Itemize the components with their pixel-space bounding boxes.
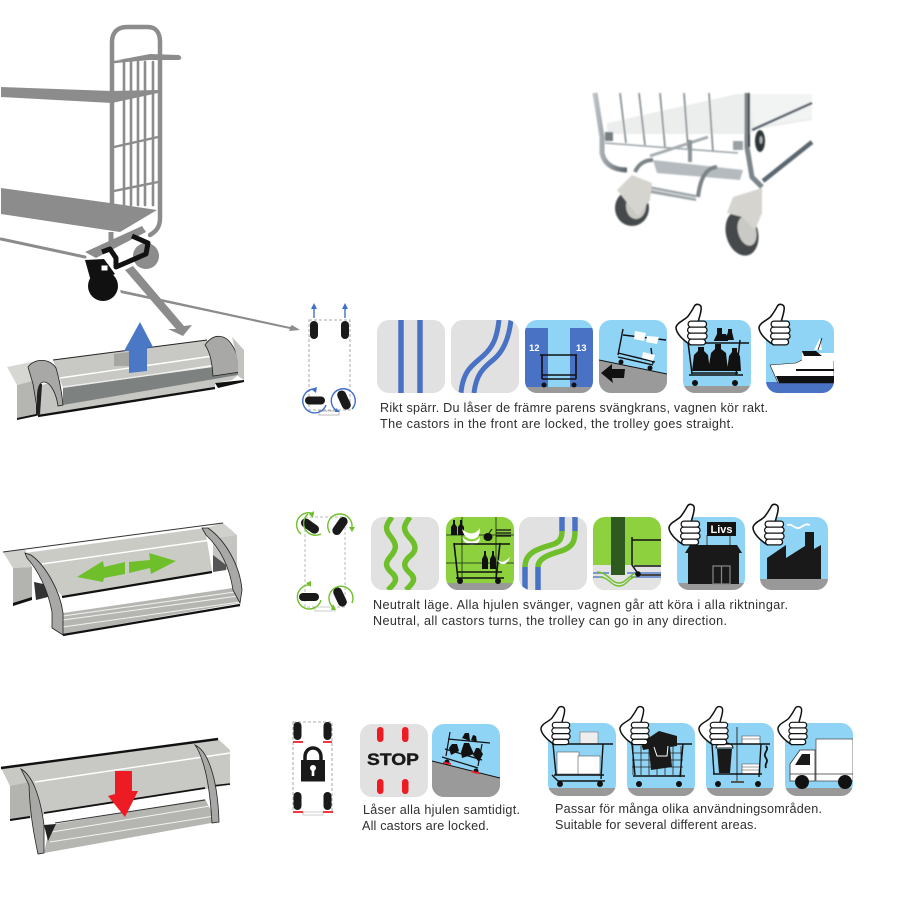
- icon: curved green and blue tracks: [519, 517, 587, 590]
- icon: front castor wheel: [85, 259, 118, 301]
- icon: narrow aisle 12 13: [525, 320, 593, 393]
- arrow: to pedal: [125, 266, 192, 336]
- text: straight lock description: [380, 401, 768, 431]
- pedal: up position with blue arrow: [7, 322, 244, 420]
- icon: STOP with red castors: STOP: [367, 750, 419, 769]
- icon: thumb up six: [620, 707, 649, 745]
- handle pedal: [633, 183, 696, 201]
- icon: grocery trolley on green: [446, 517, 514, 590]
- text: locked description: Låser alla hjulen samtidigt.: [363, 803, 520, 817]
- text: neutral description: Neutralt läge. Alla hjulen svänger, vagnen går att köra i alla riktningar.: [373, 598, 788, 612]
- icon: ferry boat: [766, 320, 834, 393]
- text: several areas description: Passar för många olika användningsområden.: [555, 802, 822, 816]
- text: several areas description: [555, 802, 822, 832]
- pedal: locked with red arrow: [1, 739, 230, 854]
- text: locked description: All castors are locked.: [362, 819, 489, 833]
- icon: thumb up two: [759, 304, 790, 345]
- icon: delivery truck: [785, 723, 853, 796]
- castor diagram: straight lock: [303, 303, 355, 415]
- icon: thumb up seven: [699, 707, 728, 745]
- text: Livs sign: Livs: [710, 524, 733, 536]
- icon: thumb up eight: [778, 707, 807, 745]
- text: neutral description: Neutral, all castors turns, the trolley can go in any direction.: [373, 614, 727, 628]
- arrow: green left: [77, 561, 125, 582]
- icon: padlock: [301, 748, 325, 782]
- icon: STOP with red castors: [360, 724, 428, 797]
- icon: trolley on slope: [599, 320, 667, 393]
- icon: trolley with heavy weights: [683, 320, 751, 393]
- text: straight lock description: The castors in the front are locked, the trolley goes straight.: [380, 417, 734, 431]
- photo: trolley castors: [595, 93, 812, 259]
- text: straight lock description: Rikt spärr. Du låser de främre parens svängkrans, vagnen kör rakt.: [380, 401, 768, 415]
- left castor: [615, 190, 649, 226]
- arrow: to castor diagram: [120, 290, 300, 331]
- icon: locked trolley on slope: [432, 724, 500, 797]
- text: Livs sign: [707, 522, 736, 536]
- icon: threshold and pole: [593, 517, 661, 590]
- illustration: trolley side view: [1, 27, 300, 336]
- text: several areas description: Suitable for several different areas.: [555, 818, 757, 832]
- icon: straight tracks: [377, 320, 445, 393]
- icon: narrow aisle 12 13: 12: [529, 343, 540, 354]
- text: locked description: [362, 803, 520, 833]
- icon: narrow aisle 12 13: 13: [576, 343, 587, 354]
- icon: thumb up one: [676, 304, 707, 345]
- arrow: green right: [129, 553, 176, 574]
- castor diagram: neutral: [297, 511, 355, 611]
- icon: laundry basket trolley: [627, 723, 695, 796]
- text: neutral description: [373, 598, 788, 628]
- icon: curved tracks: [451, 320, 519, 393]
- icon: thumb up three: [669, 504, 700, 545]
- right castor: [721, 207, 763, 259]
- icon: black pedal handle: [102, 236, 148, 267]
- castor diagram: all locked: [293, 722, 333, 815]
- icon: thumb up four: [753, 504, 784, 545]
- arrow: red down: [108, 771, 138, 817]
- icon: trolley with boxes: [548, 723, 616, 796]
- icon: cleaning trolley: [706, 723, 774, 796]
- icon: Livs grocery store: [677, 517, 745, 590]
- pedal: neutral with green arrows: [3, 523, 242, 635]
- icon: factory: [760, 517, 828, 590]
- arrow: blue up: [124, 322, 153, 373]
- icon: thumb up five: [541, 707, 570, 745]
- icon: wavy tracks: [371, 517, 439, 590]
